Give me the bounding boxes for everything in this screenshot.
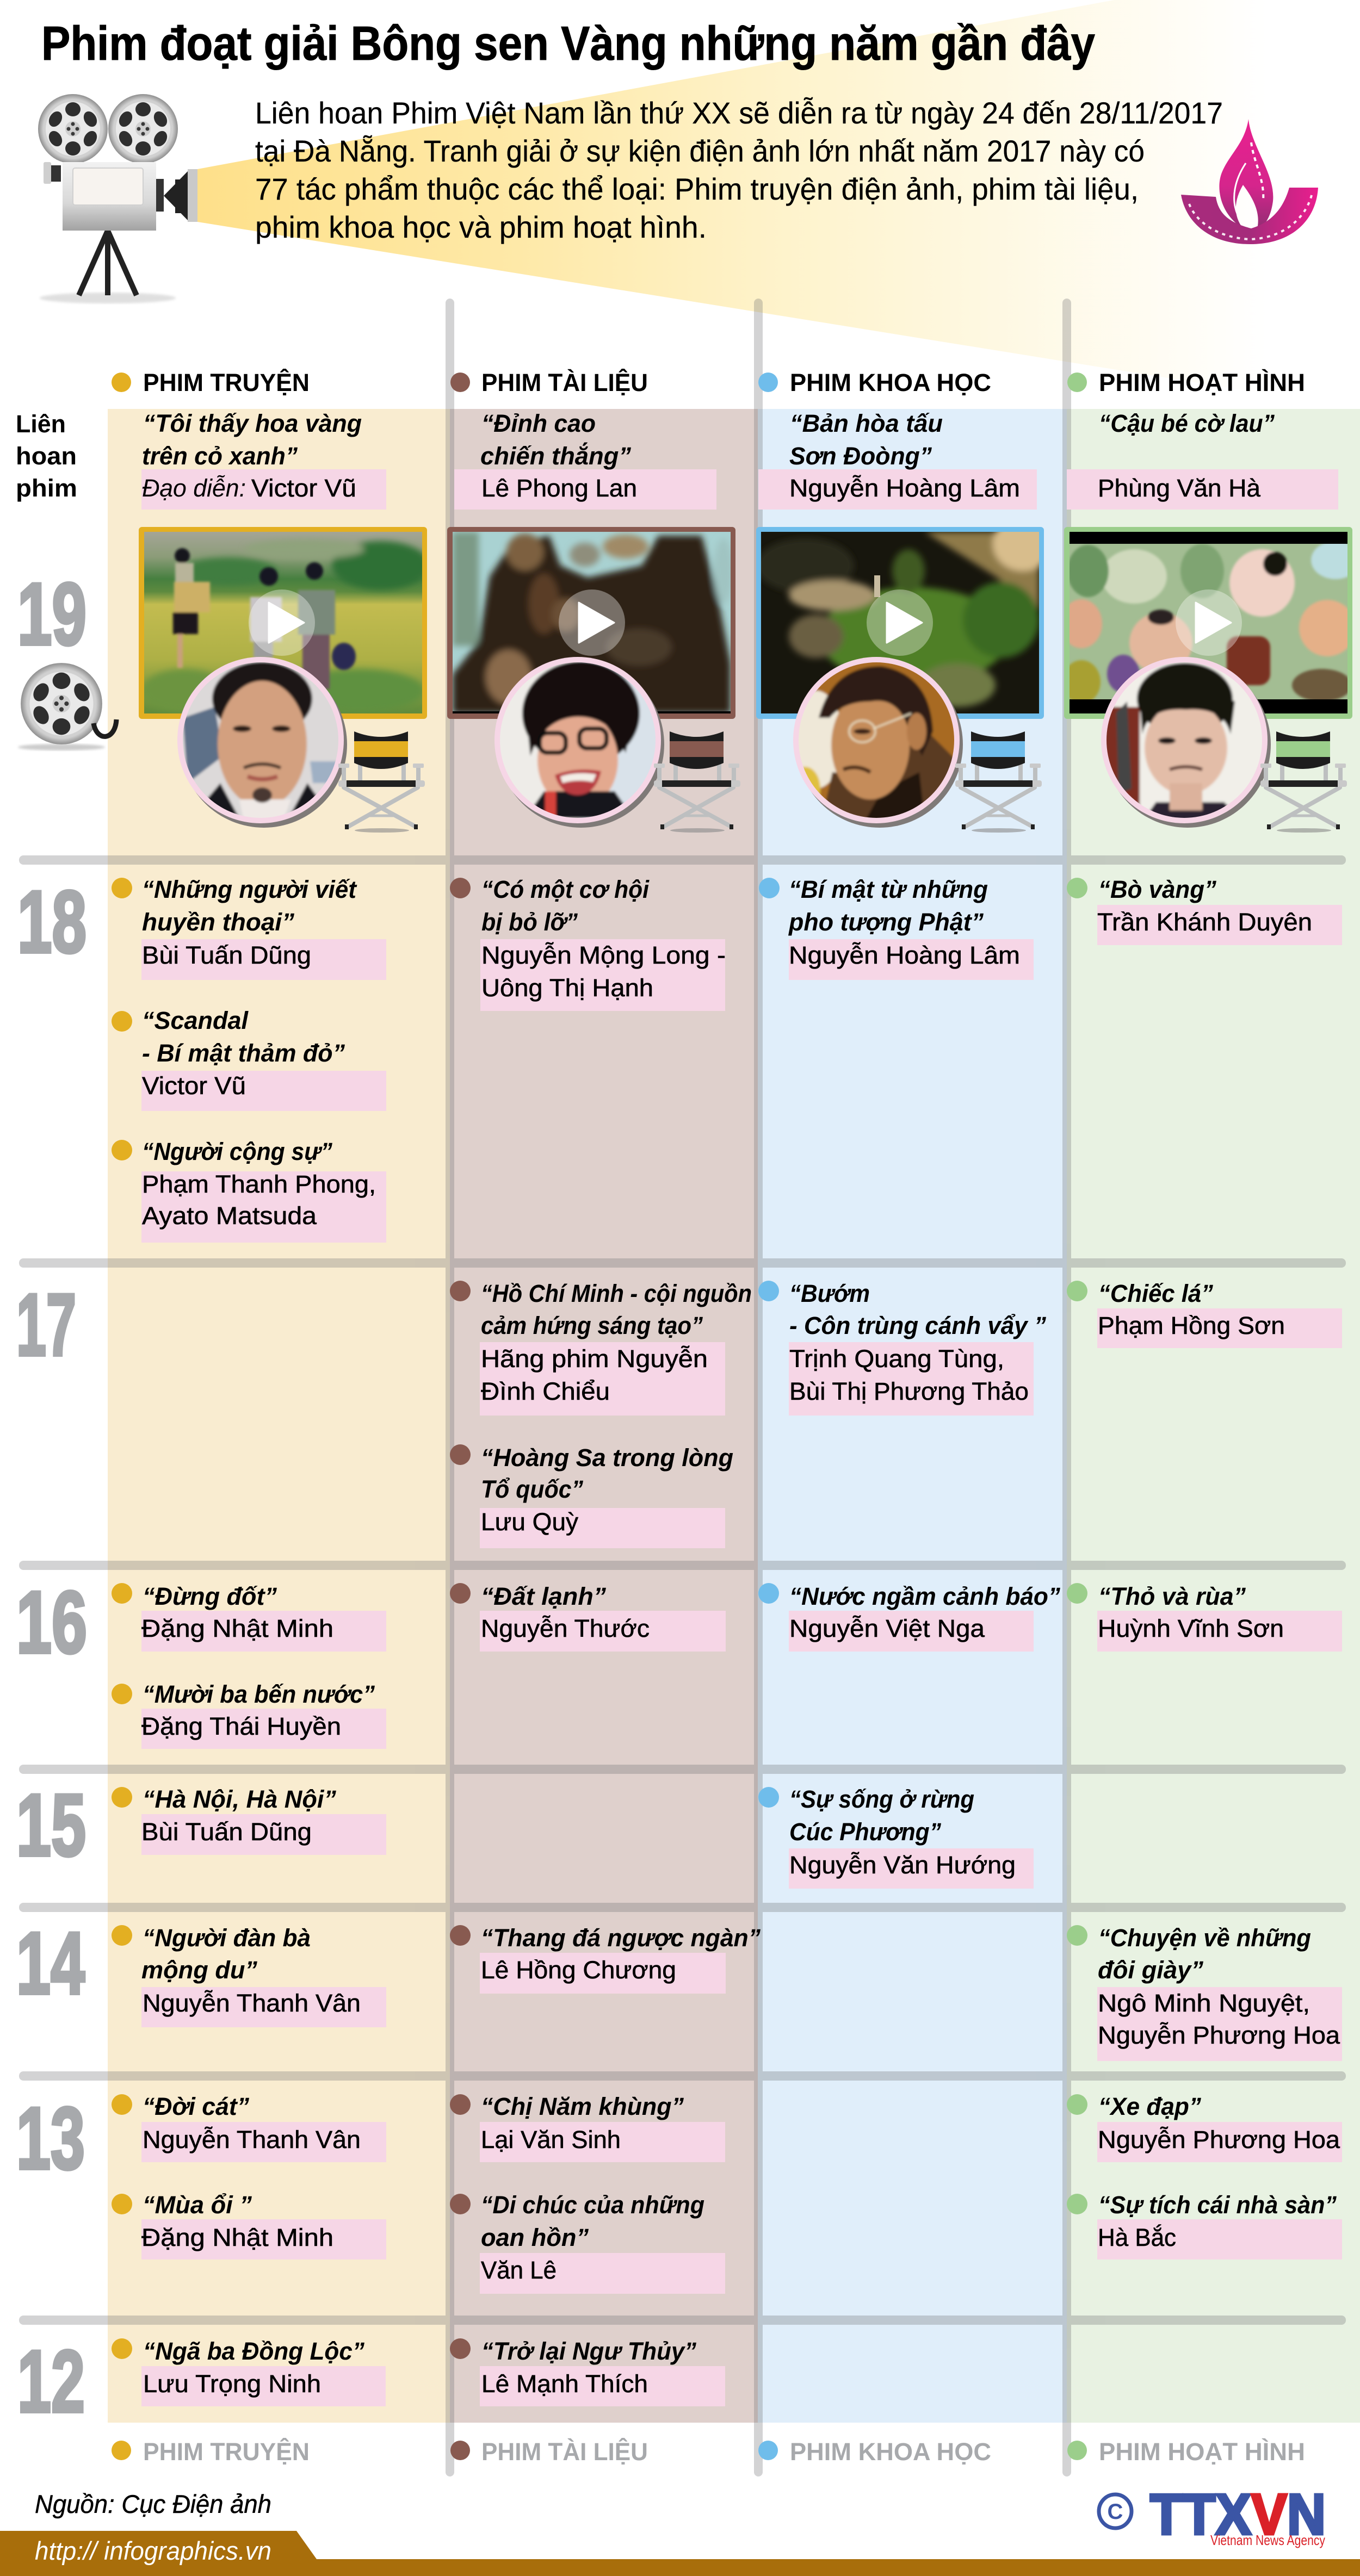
film entry: Mùa ổi <box>112 2191 386 2260</box>
film entry: Bướm - Côn trùng cánh vẩy: Bùi Thị Phương Thảo <box>789 1377 1029 1405</box>
icon: director chair blue <box>955 731 1042 833</box>
film entry: Chị Năm khùng <box>450 2093 725 2162</box>
film entry: Đời cát <box>112 2093 386 2162</box>
intro text: 77 tác phẩm thuộc các thể loại: Phim truyện điện ảnh, phim tài liệu, <box>255 172 1139 206</box>
film entry: Hồ Chí Minh - cội nguồn cảm hứng sáng tạo <box>450 1280 752 1416</box>
column headers: PHIM HOẠT HÌNH <box>1099 369 1305 396</box>
panel: festival 16 <box>16 1573 1342 1749</box>
bottom column headers: PHIM TÀI LIỆU <box>481 2438 648 2466</box>
film entry: Đất lạnh <box>450 1582 726 1652</box>
film entry: Sự sống ở rừng Cúc Phương: Cúc Phương” <box>789 1818 941 1846</box>
film entry: Mùa ổi: Đặng Nhật Minh <box>141 2224 333 2251</box>
bottom column headers: PHIM TRUYỆN <box>143 2438 310 2466</box>
film entry: Ngã ba Đồng Lộc: “Ngã ba Đồng Lộc” <box>143 2337 364 2365</box>
icon: film reel <box>18 663 116 750</box>
film entry: Bò vàng <box>1067 876 1342 945</box>
film entry: Đỉnh cao chiến thắng: “Đỉnh cao <box>481 409 596 437</box>
film entry: Chiếc lá: Phạm Hồng Sơn <box>1098 1312 1285 1339</box>
film entry: Tôi thấy hoa vàng trên cỏ xanh: “Tôi thấy hoa vàng <box>143 409 362 437</box>
footer band <box>0 2531 1360 2576</box>
number 19: 19 <box>17 565 86 663</box>
bottom column headers: PHIM HOẠT HÌNH <box>1099 2438 1305 2466</box>
film entry: Nước ngầm cảnh báo: Nguyễn Việt Nga <box>789 1615 985 1642</box>
intro text: Liên hoan Phim Việt Nam lần thứ XX sẽ diễn ra từ ngày 24 đến 28/11/2017 <box>255 96 1223 130</box>
film entry: Trở lại Ngư Thủy: “Trở lại Ngư Thủy” <box>481 2337 696 2365</box>
film entry: Chuyện về những đôi giày: “Chuyện về những <box>1098 1924 1311 1952</box>
photo: animated film characters <box>1061 527 1360 719</box>
number 12: 12 <box>17 2332 85 2431</box>
film entry: Di chúc của những oan hồn: “Di chúc của những <box>481 2191 704 2219</box>
bottom column headers: PHIM KHOA HỌC <box>790 2438 991 2466</box>
film entry: Sự sống ở rừng Cúc Phương: “Sự sống ở rừng <box>789 1785 974 1813</box>
film entry: Thang đá ngược ngàn: “Thang đá ngược ngàn” <box>481 1924 761 1952</box>
icon: director chair gold <box>338 731 425 833</box>
film entry: Hà Nội, Hà Nội <box>112 1785 386 1855</box>
film entry: Chuyện về những đôi giày: Nguyễn Phương Hoa <box>1098 2021 1340 2049</box>
film entry: Sự sống ở rừng Cúc Phương: Nguyễn Văn Hướng <box>789 1851 1016 1879</box>
panel: festival 14 <box>16 1914 1342 2061</box>
film entry: Đỉnh cao chiến thắng <box>454 409 716 510</box>
bottom column headers <box>112 2438 1305 2466</box>
film entry: Bản hòa tấu Sơn Đoòng: Nguyễn Hoàng Lâm <box>789 474 1020 502</box>
number 15: 15 <box>16 1776 86 1874</box>
intro text <box>255 96 1223 244</box>
film entry: Người đàn bà mộng du: “Người đàn bà <box>143 1924 311 1952</box>
film entry: Hà Nội, Hà Nội: Bùi Tuấn Dũng <box>141 1818 312 1846</box>
panel: festival 12 <box>17 2332 725 2431</box>
panel: festival 17 <box>16 1276 1342 1548</box>
film entry: Trở lại Ngư Thủy <box>450 2337 725 2406</box>
film entry: Hồ Chí Minh - cội nguồn cảm hứng sáng tạo: Hãng phim Nguyễn <box>481 1345 708 1373</box>
film entry: Trở lại Ngư Thủy: Lê Mạnh Thích <box>481 2370 648 2398</box>
panel: festival 15 <box>16 1776 1034 1889</box>
film entry: Mùa ổi: “Mùa ổi ” <box>143 2191 252 2219</box>
portrait: Phùng Văn Hà <box>1101 657 1271 828</box>
label: Liên hoan phim: Liên <box>16 410 66 438</box>
film entry: Di chúc của những oan hồn <box>450 2191 725 2294</box>
film entry: Ngã ba Đồng Lộc <box>112 2337 386 2406</box>
film entry: Ngã ba Đồng Lộc: Lưu Trọng Ninh <box>143 2370 321 2398</box>
logo: TTXVN: TTXVN <box>1150 2482 1326 2547</box>
number 13: 13 <box>16 2089 85 2188</box>
play buttons <box>249 589 1242 656</box>
film entry: Có một cơ hội bị bỏ lỡ: Uông Thị Hạnh <box>481 974 653 1002</box>
column headers: PHIM KHOA HỌC <box>790 369 991 396</box>
film entry: Cậu bé cờ lau: Phùng Văn Hà <box>1098 474 1261 502</box>
film entry: Chị Năm khùng: “Chị Năm khùng” <box>481 2093 684 2120</box>
projector light beam <box>197 0 1360 409</box>
film entry: Đời cát: Nguyễn Thanh Vân <box>143 2126 361 2153</box>
number 14: 14 <box>16 1914 85 2013</box>
film entry: Chiếc lá <box>1067 1280 1342 1348</box>
film entry: Đất lạnh: Nguyễn Thước <box>481 1615 650 1642</box>
number 18: 18 <box>17 873 86 971</box>
film entry: Bản hòa tấu Sơn Đoòng: Sơn Đoòng” <box>789 442 932 470</box>
film entry: Người cộng sự: Ayato Matsuda <box>142 1202 317 1230</box>
film entry: Nước ngầm cảnh báo: “Nước ngầm cảnh báo” <box>789 1582 1060 1610</box>
film entry: Tôi thấy hoa vàng trên cỏ xanh <box>141 409 386 510</box>
film entry: Hoàng Sa trong lòng Tổ quốc: Lưu Quỳ <box>481 1508 579 1536</box>
film entry: Sự tích cái nhà sàn <box>1067 2191 1342 2260</box>
film entry: Mười ba bến nước <box>112 1680 386 1749</box>
film entry: Hồ Chí Minh - cội nguồn cảm hứng sáng tạo: “Hồ Chí Minh - cội nguồn <box>481 1280 752 1307</box>
film entry: Những người viết huyền thoại <box>112 876 386 980</box>
film entry: Chiếc lá: “Chiếc lá” <box>1098 1280 1213 1307</box>
film entry: Thang đá ngược ngàn <box>450 1924 761 1994</box>
photo: war film scene <box>447 527 735 719</box>
film entry: Người đàn bà mộng du <box>112 1924 386 2027</box>
film entry: Hồ Chí Minh - cội nguồn cảm hứng sáng tạo: cảm hứng sáng tạo” <box>481 1312 703 1339</box>
film entry: Chuyện về những đôi giày: Ngô Minh Nguyệt, <box>1098 1989 1310 2017</box>
column headers: PHIM TRUYỆN <box>143 369 310 396</box>
film entry: Bướm - Côn trùng cánh vẩy <box>758 1280 1046 1416</box>
column headers: PHIM TÀI LIỆU <box>481 369 648 396</box>
film entry: Người đàn bà mộng du: mộng du” <box>141 1956 257 1984</box>
film entry: Cậu bé cờ lau: “Cậu bé cờ lau” <box>1099 409 1275 437</box>
film entry: Đừng đốt <box>112 1582 386 1652</box>
film entry: Đất lạnh: “Đất lạnh” <box>481 1582 607 1610</box>
film entry: Người cộng sự: “Người cộng sự” <box>142 1138 332 1165</box>
portrait: Lê Phong Lan <box>494 657 664 828</box>
portrait: Nguyễn Hoàng Lâm <box>789 657 963 828</box>
film entry: Hà Nội, Hà Nội: “Hà Nội, Hà Nội” <box>143 1785 336 1813</box>
film entry: Đừng đốt: Đặng Nhật Minh <box>141 1615 333 1642</box>
column panels <box>108 409 1360 2423</box>
icon: director chair green <box>1260 731 1347 833</box>
film entry: Đời cát: “Đời cát” <box>143 2093 249 2120</box>
icon: film projector <box>38 94 197 303</box>
intro text: phim khoa học và phim hoạt hình. <box>255 210 707 244</box>
film entry: Sự tích cái nhà sàn: “Sự tích cái nhà sàn” <box>1098 2191 1337 2219</box>
film entry: Chị Năm khùng: Lại Văn Sinh <box>481 2126 621 2153</box>
film entry: Người cộng sự: Phạm Thanh Phong, <box>142 1170 376 1198</box>
film entry: Những người viết huyền thoại: “Những người viết <box>142 876 357 903</box>
label: Liên hoan phim: hoan <box>16 442 77 470</box>
film entry: Scandal <box>112 1007 386 1111</box>
film entry: Sự sống ở rừng Cúc Phương <box>758 1785 1034 1889</box>
film entry: Có một cơ hội bị bỏ lỡ: Nguyễn Mộng Long - <box>481 941 726 969</box>
photo: Son Doong cave <box>756 517 1053 719</box>
film entry: Đỉnh cao chiến thắng: chiến thắng” <box>480 442 631 470</box>
film entry: Bướm - Côn trùng cánh vẩy: “Bướm <box>789 1280 870 1307</box>
film entry: Bò vàng: Trần Khánh Duyên <box>1097 908 1312 936</box>
film entry: Scandal: Victor Vũ <box>142 1072 246 1100</box>
film entry: Tôi thấy hoa vàng trên cỏ xanh: Victor Vũ <box>251 474 356 502</box>
film entry: Hoàng Sa trong lòng Tổ quốc: Tổ quốc” <box>481 1475 583 1503</box>
film entry: Thang đá ngược ngàn: Lê Hồng Chương <box>481 1956 676 1984</box>
film entry: Hoàng Sa trong lòng Tổ quốc <box>450 1444 733 1548</box>
portrait: Victor Vũ <box>177 657 347 828</box>
column headers <box>112 369 1305 396</box>
film entry: Bản hòa tấu Sơn Đoòng <box>758 409 1037 510</box>
film entry: Bí mật từ những pho tượng Phật <box>759 876 1034 980</box>
film entry: Có một cơ hội bị bỏ lỡ: “Có một cơ hội <box>481 876 650 903</box>
film entry: Scandal: - Bí mật thảm đỏ” <box>142 1039 345 1067</box>
film entry: Bướm - Côn trùng cánh vẩy: Trịnh Quang Tùng, <box>789 1345 1004 1373</box>
film entry: Cậu bé cờ lau <box>1067 409 1338 510</box>
film entry: Có một cơ hội bị bỏ lỡ: bị bỏ lỡ” <box>481 908 578 936</box>
film entry: Bướm - Côn trùng cánh vẩy: - Côn trùng cánh vẩy ” <box>789 1312 1046 1339</box>
film entry: Chuyện về những đôi giày <box>1067 1924 1342 2061</box>
film entry: Đừng đốt: “Đừng đốt” <box>143 1582 277 1610</box>
film entry: Người cộng sự <box>112 1138 386 1243</box>
film entry: Bí mật từ những pho tượng Phật: Nguyễn Hoàng Lâm <box>789 941 1020 969</box>
film entry: Có một cơ hội bị bỏ lỡ <box>450 876 726 1011</box>
panel: festival 13 <box>16 2089 1342 2294</box>
film entry: Hồ Chí Minh - cội nguồn cảm hứng sáng tạo: Đình Chiểu <box>481 1377 610 1405</box>
panel: festival 18 <box>17 873 1342 1243</box>
title: Phim đoạt giải Bông sen Vàng những năm gần đây <box>41 16 1095 70</box>
footer url: http:// infographics.vn <box>35 2536 271 2565</box>
film entry: Nước ngầm cảnh báo <box>758 1582 1060 1652</box>
film entry: Mười ba bến nước: Đặng Thái Huyền <box>141 1712 341 1740</box>
film entry: Tôi thấy hoa vàng trên cỏ xanh: Đạo diễn: <box>142 474 246 502</box>
icon: lotus film logo <box>1181 119 1318 244</box>
film entry: Đỉnh cao chiến thắng: Lê Phong Lan <box>481 474 637 502</box>
film entry: Hoàng Sa trong lòng Tổ quốc: “Hoàng Sa trong lòng <box>481 1444 733 1472</box>
film entry: Tôi thấy hoa vàng trên cỏ xanh: trên cỏ xanh” <box>142 442 298 470</box>
panel: festival 19 <box>17 409 1360 833</box>
film entry: Thỏ và rùa: Huỳnh Vĩnh Sơn <box>1098 1615 1284 1642</box>
film entry: Scandal: “Scandal <box>142 1007 249 1034</box>
film entry: Bò vàng: “Bò vàng” <box>1098 876 1216 903</box>
film entry: Xe đạp: Nguyễn Phương Hoa <box>1098 2126 1340 2153</box>
intro text: tại Đà Nẵng. Tranh giải ở sự kiện điện ảnh lớn nhất năm 2017 này có <box>255 134 1145 168</box>
icon: director chair brown <box>654 731 740 833</box>
logo: TTXVN: Vietnam News Agency <box>1210 2532 1325 2548</box>
film entry: Những người viết huyền thoại: huyền thoại” <box>142 908 295 936</box>
film entry: Di chúc của những oan hồn: Văn Lê <box>481 2256 557 2284</box>
film entry: Bí mật từ những pho tượng Phật: pho tượng Phật” <box>788 908 984 936</box>
film entry: Xe đạp: “Xe đạp” <box>1098 2093 1201 2120</box>
film entry: Những người viết huyền thoại: Bùi Tuấn Dũng <box>142 941 311 969</box>
film entry: Sự tích cái nhà sàn: Hà Bắc <box>1098 2224 1176 2251</box>
photo: rice field children <box>139 527 430 719</box>
film entry: Thỏ và rùa <box>1067 1582 1342 1652</box>
label: Liên hoan phim: phim <box>16 474 77 502</box>
logo: TTXVN: C <box>1108 2500 1123 2524</box>
label: Liên hoan phim <box>16 410 77 502</box>
film entry: Bản hòa tấu Sơn Đoòng: “Bản hòa tấu <box>790 409 943 437</box>
number 16: 16 <box>16 1573 87 1672</box>
film entry: Mười ba bến nước: “Mười ba bến nước” <box>143 1680 375 1708</box>
film entry: Thỏ và rùa: “Thỏ và rùa” <box>1098 1582 1246 1610</box>
film entry: Chuyện về những đôi giày: đôi giày” <box>1098 1956 1203 1984</box>
film entry: Người đàn bà mộng du: Nguyễn Thanh Vân <box>143 1989 361 2017</box>
source note: Nguồn: Cục Điện ảnh <box>35 2490 271 2518</box>
film entry: Di chúc của những oan hồn: oan hồn” <box>481 2224 589 2251</box>
film entry: Xe đạp <box>1067 2093 1342 2162</box>
number 17: 17 <box>16 1276 76 1374</box>
film entry: Bí mật từ những pho tượng Phật: “Bí mật từ những <box>789 876 988 903</box>
